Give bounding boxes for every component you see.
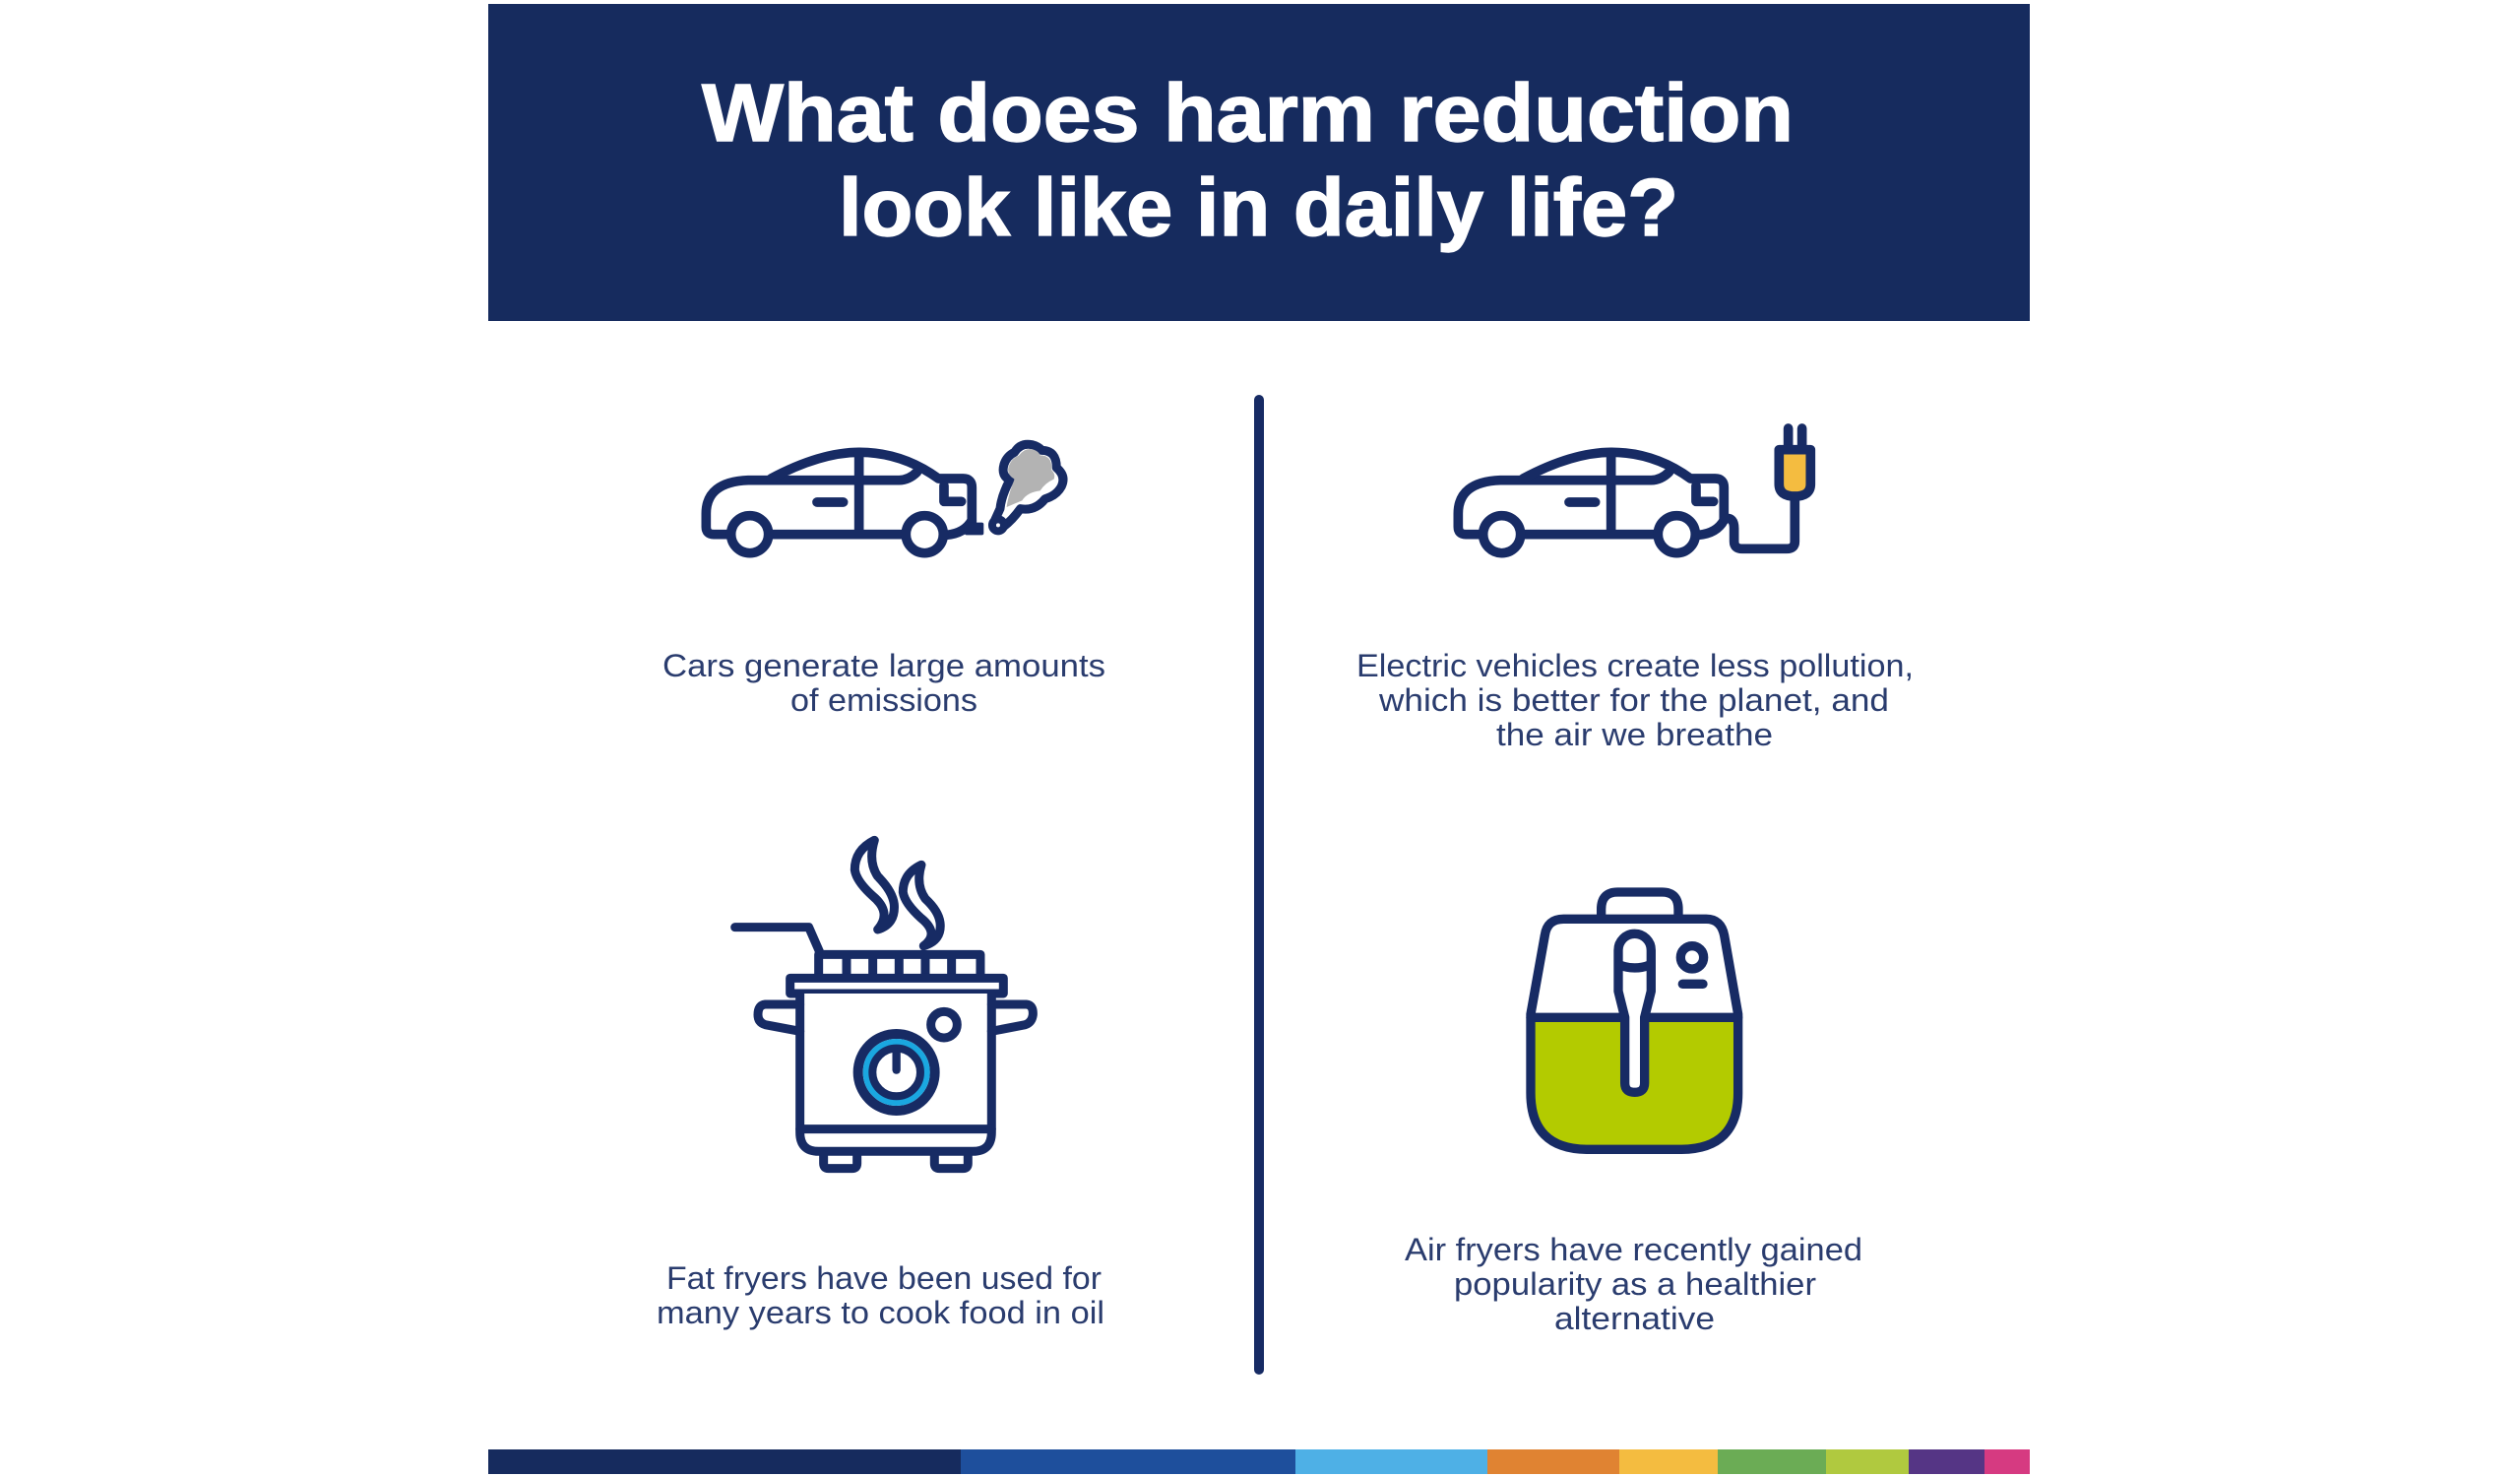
panel: petrol car [662, 444, 1105, 718]
text: electric vehicles: Electric vehicles create less pollution, [1356, 648, 1914, 683]
text: cars generate emissions [662, 648, 1105, 718]
icon: car with plug [1458, 428, 1810, 553]
text: electric vehicles: which is better for the planet, and [1378, 682, 1889, 718]
title: look like in daily life? [839, 161, 1678, 253]
text: air fryers [1405, 1232, 1862, 1336]
icon: car with exhaust smoke [706, 444, 1063, 553]
colour footer bar [488, 1449, 2030, 1474]
text: air fryers: popularity as a healthier [1454, 1266, 1816, 1302]
title [702, 67, 1794, 253]
text: electric vehicles: the air we breathe [1496, 717, 1773, 752]
title: What does harm reduction [702, 67, 1794, 159]
text: air fryers: Air fryers have recently gained [1405, 1232, 1862, 1267]
panel: electric vehicle [1356, 428, 1914, 752]
icon: fat fryer [735, 840, 1033, 1169]
text: fat fryers: many years to cook food in oil [657, 1295, 1104, 1330]
icon: air fryer [1531, 892, 1738, 1149]
center divider [1254, 395, 1264, 1375]
panel: air fryer [1405, 892, 1862, 1336]
text: air fryers: alternative [1554, 1301, 1715, 1336]
panel: fat fryer [657, 840, 1104, 1330]
header banner [488, 4, 2030, 321]
text: fat fryers: Fat fryers have been used for [666, 1260, 1102, 1296]
text: cars generate emissions: of emissions [790, 682, 977, 718]
text: cars generate emissions: Cars generate large amounts [662, 648, 1105, 683]
text: electric vehicles [1356, 648, 1914, 752]
text: fat fryers [657, 1260, 1104, 1330]
